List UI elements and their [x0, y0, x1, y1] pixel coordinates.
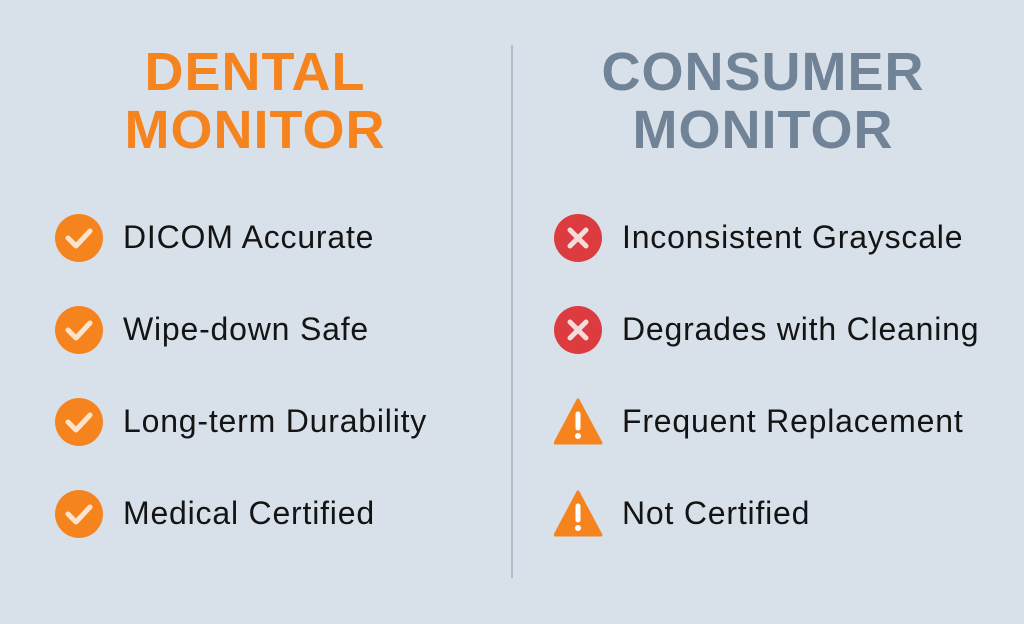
title: dental monitor: DENTAL — [144, 42, 365, 102]
item: Frequent Replacement — [554, 398, 964, 444]
title: dental monitor: MONITOR — [124, 100, 386, 160]
divider — [511, 45, 513, 578]
title: dental monitor — [124, 42, 386, 160]
item: Not Certified: Not Certified — [622, 495, 810, 531]
item: Medical Certified — [55, 490, 375, 538]
item: Inconsistent Grayscale — [554, 214, 963, 262]
title: consumer monitor — [601, 42, 924, 160]
item: Degrades with Cleaning: Degrades with Cleaning — [622, 311, 979, 347]
item: Frequent Replacement: Frequent Replacement — [622, 403, 964, 439]
item: Inconsistent Grayscale: Inconsistent Grayscale — [622, 219, 963, 255]
item: Wipe-down Safe: Wipe-down Safe — [123, 311, 369, 347]
item: Not Certified — [554, 490, 810, 536]
item: Long-term Durability: Long-term Durability — [123, 403, 427, 439]
item: Long-term Durability — [55, 398, 427, 446]
item: Wipe-down Safe — [55, 306, 369, 354]
item: DICOM Accurate: DICOM Accurate — [123, 219, 374, 255]
panel: consumer monitor list — [554, 214, 979, 536]
title: consumer monitor: CONSUMER — [601, 42, 924, 102]
item: Medical Certified: Medical Certified — [123, 495, 375, 531]
panel: dental monitor list — [55, 214, 427, 538]
title: consumer monitor: MONITOR — [632, 100, 894, 160]
item: Degrades with Cleaning — [554, 306, 979, 354]
item: DICOM Accurate — [55, 214, 374, 262]
